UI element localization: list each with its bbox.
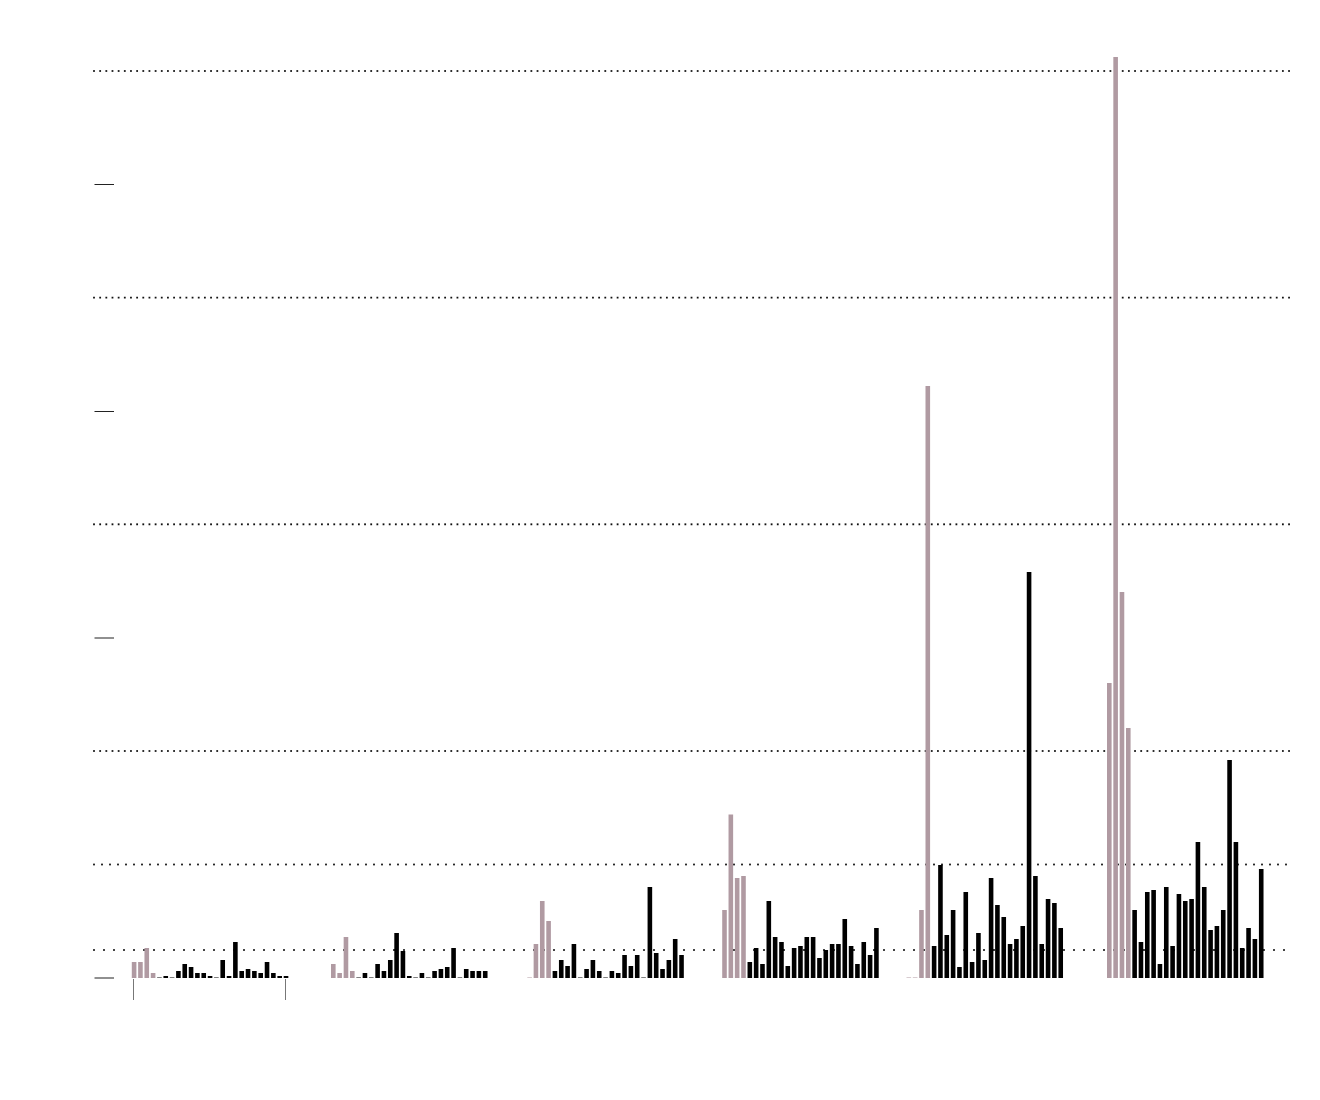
bar group 6: [1107, 57, 1264, 978]
y-axis ticks: [94, 184, 114, 978]
bar group 5: [906, 386, 1063, 978]
bar group 3: [527, 887, 684, 978]
x-axis range ticks: [134, 979, 286, 1000]
dotted gridlines: [93, 71, 1291, 950]
bar group 1: [132, 942, 288, 978]
bar group 2: [331, 933, 488, 978]
bar group 4: [722, 814, 879, 978]
